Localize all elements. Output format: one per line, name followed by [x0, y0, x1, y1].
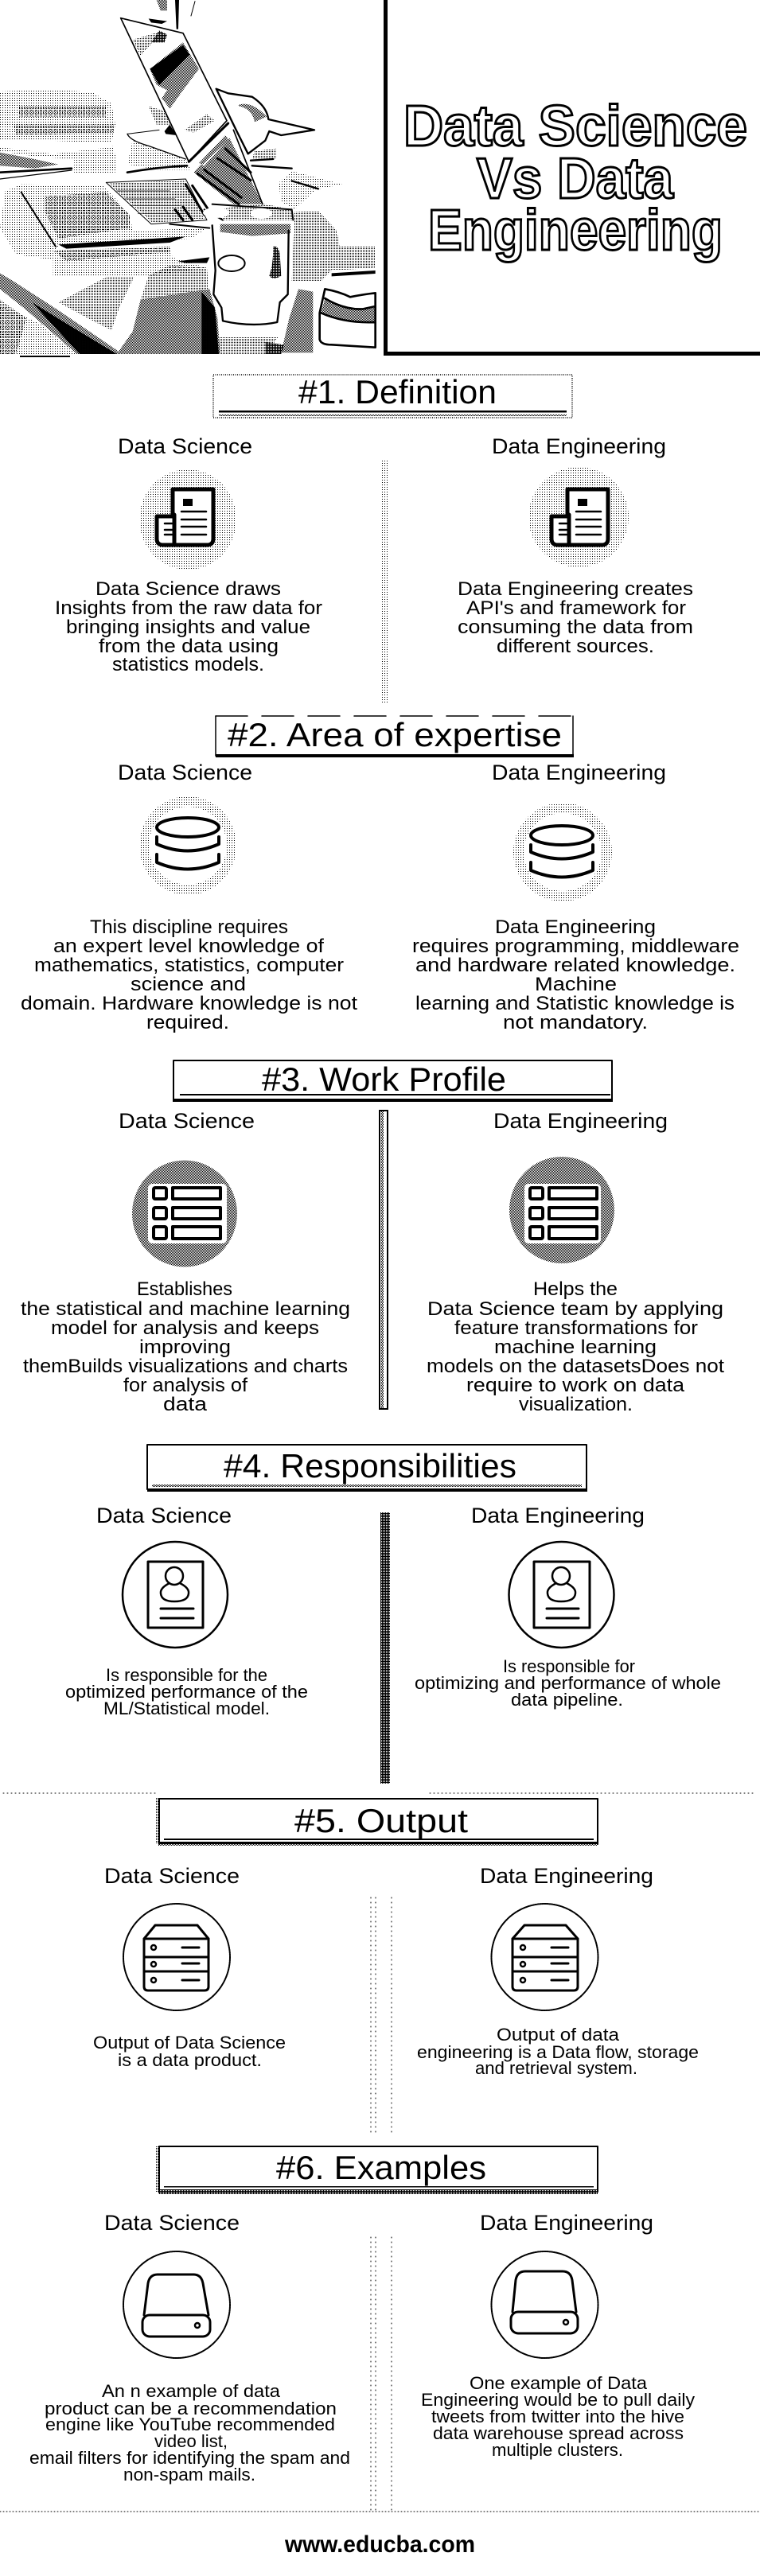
icon: hard drive left: [123, 2251, 230, 2358]
label: data engineering column: Data Engineering: [471, 1504, 645, 1527]
text: data engineering expertise: Machine: [535, 974, 617, 995]
heading: #2. Area of expertise: #2. Area of expertise: [228, 716, 562, 753]
text: data engineering output: Output of data: [497, 2025, 620, 2045]
text: data engineering definition: [458, 578, 693, 657]
label: data science column: Data Science: [118, 434, 252, 458]
icon: database right: [513, 803, 612, 901]
text: data science work profile: improving: [139, 1337, 231, 1358]
text: data engineering examples: One example of Data: [470, 2373, 648, 2393]
heading: #5. Output: #5. Output: [294, 1802, 468, 1839]
text: data engineering expertise: and hardware related knowledge.: [415, 955, 735, 976]
label: data science column: Data Science: [104, 1864, 240, 1888]
text: data science expertise: science and: [131, 974, 246, 995]
text: data science work profile: model for analysis and keeps: [51, 1317, 319, 1339]
text: data science expertise: mathematics, statistics, computer: [34, 955, 344, 976]
title: Data Science: [403, 95, 747, 158]
header divider and frame: [20, 0, 760, 357]
column divider: [371, 1897, 392, 2132]
heading: #6. Examples: #6. Examples: [276, 2149, 486, 2186]
text: data science output: Output of Data Science: [93, 2033, 286, 2053]
text: data science work profile: [21, 1278, 350, 1415]
text: data engineering examples: Engineering would be to pull daily: [421, 2390, 695, 2410]
column divider: [382, 460, 389, 702]
text: data science definition: [55, 578, 322, 675]
heading: #1. Definition: [213, 373, 572, 418]
label: data science column: Data Science: [96, 1504, 232, 1527]
text: data science expertise: [21, 916, 357, 1033]
text: data science expertise: an expert level knowledge of: [53, 936, 324, 957]
text: data science definition: Data Science draws: [95, 578, 281, 600]
text: data engineering output: [417, 2025, 699, 2078]
text: data engineering work profile: models on the datasetsDoes not: [427, 1356, 724, 1377]
footer: website: www.educba.com: [284, 2531, 475, 2558]
text: data science output: [93, 2033, 286, 2070]
text: data engineering responsibilities: Is responsible for: [503, 1656, 635, 1676]
text: data science examples: non-spam mails.: [123, 2465, 255, 2485]
text: data science examples: An n example of data: [102, 2381, 281, 2401]
label: data engineering column: Data Engineering: [493, 1109, 668, 1133]
text: data science definition: statistics models.: [112, 654, 264, 675]
title: Engineering: [428, 199, 723, 263]
heading: #4. Responsibilities: #4. Responsibilities: [224, 1447, 516, 1485]
text: data science work profile: data: [163, 1394, 207, 1415]
heading: #3. Work Profile: [173, 1060, 613, 1102]
text: data science expertise: required.: [146, 1012, 229, 1033]
heading: #3. Work Profile: #3. Work Profile: [262, 1060, 506, 1098]
label: data engineering column: Data Engineering: [480, 2211, 653, 2235]
text: data engineering work profile: Helps the: [533, 1278, 618, 1300]
label: data engineering column: Data Engineering: [492, 434, 666, 458]
text: data engineering work profile: require to work on data: [466, 1375, 684, 1396]
text: data science work profile: themBuilds visualizations and charts: [23, 1356, 348, 1377]
text: data science responsibilities: [65, 1665, 308, 1718]
label: data engineering column: Data Engineering: [492, 761, 666, 784]
text: data science work profile: the statistical and machine learning: [21, 1298, 350, 1320]
text: data science examples: video list,: [154, 2431, 228, 2451]
heading: #4. Responsibilities: [147, 1445, 587, 1492]
text: data engineering work profile: [427, 1278, 724, 1415]
text: data engineering definition: consuming the data from: [458, 617, 693, 638]
text: data engineering expertise: not mandatory.: [503, 1012, 648, 1033]
label: data science column: Data Science: [104, 2211, 240, 2235]
text: data engineering examples: tweets from twitter into the hive: [431, 2407, 684, 2426]
icon: server right: [492, 1904, 598, 2010]
title: Vs Data: [477, 147, 674, 211]
heading: #6. Examples: [155, 2146, 598, 2194]
text: data engineering examples: data warehouse spread across: [433, 2423, 684, 2443]
text: data engineering work profile: machine learning: [494, 1337, 657, 1358]
text: data science expertise: domain. Hardware knowledge is not: [21, 993, 357, 1014]
text: data science examples: email filters for identifying the spam and: [29, 2448, 350, 2468]
photo: laptop and cup on desk: [0, 0, 376, 354]
text: data engineering expertise: Data Engineering: [495, 916, 656, 938]
text: data science definition: Insights from the raw data for: [55, 597, 322, 619]
text: data engineering work profile: visualization.: [519, 1394, 633, 1415]
column divider: [380, 1512, 390, 1784]
label: data science column: Data Science: [119, 1109, 255, 1133]
icon: list left: [132, 1160, 237, 1267]
text: data science responsibilities: optimized performance of the: [65, 1682, 308, 1702]
text: data science examples: [29, 2381, 350, 2485]
text: data engineering responsibilities: optimizing and performance of whole: [415, 1673, 721, 1693]
text: data engineering examples: multiple clusters.: [492, 2440, 623, 2460]
panel: section 5 output: [93, 1798, 699, 2132]
text: data engineering work profile: feature transformations for: [454, 1317, 698, 1339]
text: data science definition: from the data using: [99, 636, 279, 657]
title: [403, 95, 747, 263]
column divider: [380, 1111, 388, 1409]
label: data engineering column: Data Engineering: [480, 1864, 653, 1888]
text: data engineering responsibilities: [415, 1656, 721, 1710]
text: data science examples: product can be a recommendation: [45, 2399, 337, 2418]
text: data engineering expertise: learning and Statistic knowledge is: [415, 993, 735, 1014]
text: data science examples: engine like YouTube recommended: [45, 2415, 335, 2434]
text: data science definition: bringing insights and value: [66, 617, 310, 638]
icon: profile document left: [123, 1542, 228, 1648]
text: data engineering output: engineering is a Data flow, storage: [417, 2042, 699, 2062]
text: data engineering expertise: requires programming, middleware: [412, 936, 739, 957]
text: data engineering responsibilities: data pipeline.: [511, 1690, 623, 1710]
label: data science column: Data Science: [118, 761, 252, 784]
icon: server left: [123, 1904, 230, 2010]
icon: newspaper left: [139, 469, 236, 570]
panel: section 1 definition: [55, 373, 693, 702]
panel: section 3 work profile: [21, 1060, 724, 1415]
text: data science work profile: Establishes: [137, 1278, 232, 1300]
panel: section 6 examples: [29, 2146, 695, 2512]
text: data science responsibilities: Is responsible for the: [106, 1665, 267, 1685]
column divider: [371, 2237, 392, 2512]
text: data engineering output: and retrieval system.: [475, 2058, 637, 2078]
text: data engineering definition: Data Engineering creates: [458, 578, 693, 600]
heading: #5. Output: [155, 1798, 598, 1846]
icon: database left: [139, 796, 236, 895]
text: data science expertise: This discipline requires: [90, 916, 288, 938]
text: data science work profile: for analysis of: [123, 1375, 247, 1396]
icon: newspaper right: [528, 467, 629, 567]
icon: profile document right: [509, 1542, 614, 1648]
icon: hard drive right: [492, 2251, 598, 2358]
text: data engineering definition: API's and framework for: [466, 597, 686, 619]
text: data engineering definition: different sources.: [497, 636, 654, 657]
text: data science output: is a data product.: [118, 2050, 262, 2070]
panel: section 2 area of expertise: [21, 716, 739, 1033]
icon: list right: [509, 1157, 614, 1263]
text: data engineering work profile: Data Science team by applying: [427, 1298, 723, 1320]
text: data engineering expertise: [412, 916, 739, 1033]
text: data engineering examples: [421, 2373, 695, 2460]
text: data science responsibilities: ML/Statistical model.: [103, 1699, 270, 1718]
heading: #1. Definition: #1. Definition: [298, 373, 497, 411]
panel: section 4 responsibilities: [65, 1445, 721, 1784]
